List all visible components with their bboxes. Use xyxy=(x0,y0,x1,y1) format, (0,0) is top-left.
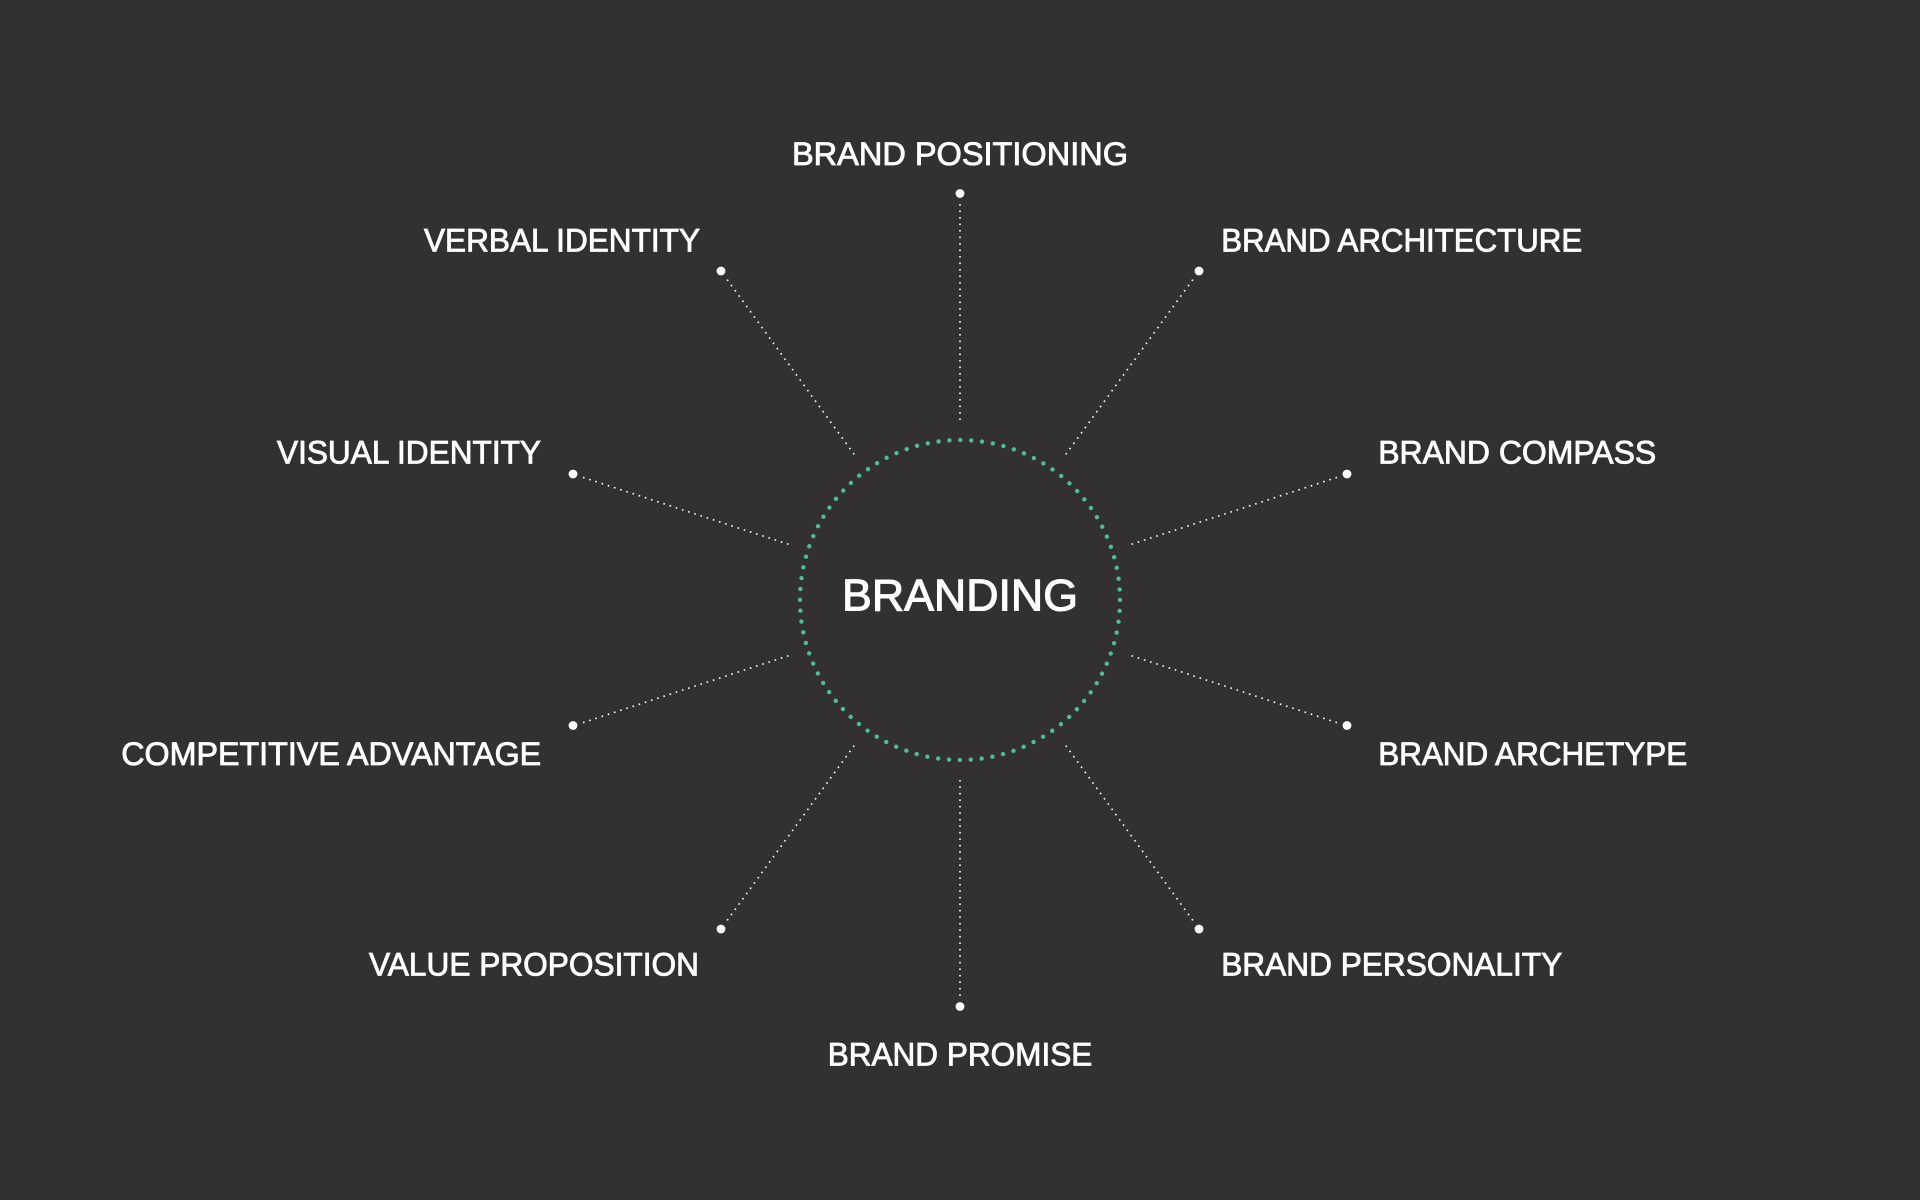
dotted teal circle xyxy=(800,440,1120,760)
spoke: brand architecture: BRAND ARCHITECTURE xyxy=(1221,223,1582,259)
spoke: verbal identity: VERBAL IDENTITY xyxy=(424,223,700,259)
spoke: brand personality xyxy=(1066,746,1562,983)
spoke: value proposition xyxy=(369,746,854,983)
spoke: brand compass xyxy=(1131,435,1656,544)
spoke: brand archetype xyxy=(1131,656,1687,772)
center title: BRANDING xyxy=(842,572,1078,621)
spoke: brand positioning xyxy=(792,136,1128,420)
spoke: verbal identity xyxy=(424,223,854,454)
spoke: brand personality: BRAND PERSONALITY xyxy=(1221,947,1562,983)
spoke: visual identity: VISUAL IDENTITY xyxy=(277,435,541,471)
spoke: competitive advantage: COMPETITIVE ADVANTAGE xyxy=(121,736,541,772)
spoke: value proposition: VALUE PROPOSITION xyxy=(369,947,699,983)
spoke: brand promise xyxy=(828,780,1092,1072)
spoke: visual identity xyxy=(277,435,789,544)
spoke: brand positioning: BRAND POSITIONING xyxy=(792,136,1128,172)
spoke: brand archetype: BRAND ARCHETYPE xyxy=(1378,736,1687,772)
spoke: brand architecture xyxy=(1066,223,1582,454)
spoke: competitive advantage xyxy=(121,656,789,772)
spoke: brand compass: BRAND COMPASS xyxy=(1378,435,1656,471)
spoke: brand promise: BRAND PROMISE xyxy=(828,1036,1092,1072)
